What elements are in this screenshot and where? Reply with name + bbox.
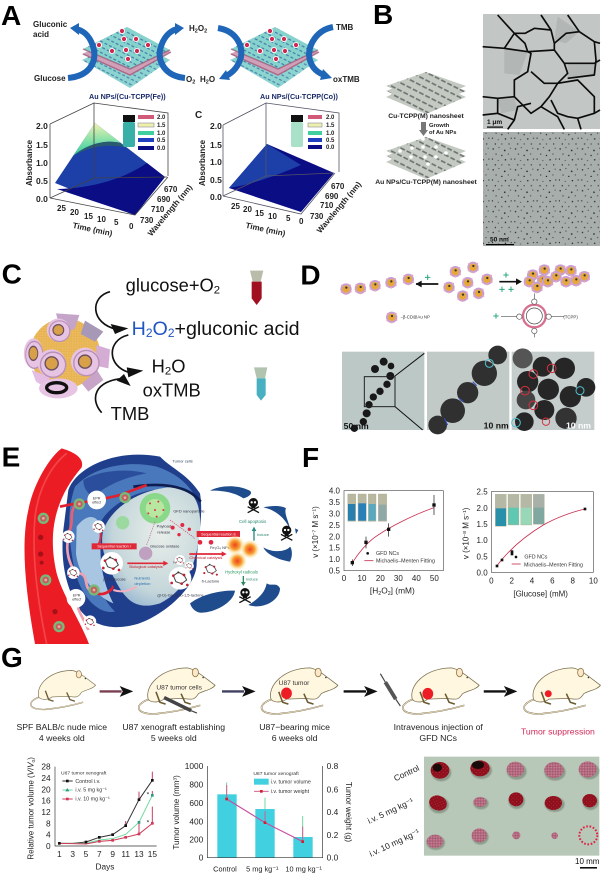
chart: H2O2 kinetics: 30 [394, 574, 403, 583]
row labels: treatment groups: i.v. 5 mg kg⁻¹ [366, 796, 415, 826]
row labels: treatment groups: i.v. 10 mg kg⁻¹ [368, 827, 421, 859]
blood vessel [25, 448, 89, 644]
TEM image: network close-up [512, 348, 595, 431]
stage captions: SPF BALB/c nude mice [16, 722, 107, 732]
legend: Fe plot vial and colour scale: 2.0 [157, 115, 166, 121]
3D plot: Au NPs/(Cu-TCPP(Co)): 15 [255, 209, 264, 218]
TEM image: chain close-up: 10 nm [484, 421, 509, 431]
chart: glucose kinetics: 8 [570, 577, 575, 586]
line chart: relative tumor volume: 11 [121, 849, 130, 859]
vessel branches and EPR effect [60, 485, 147, 630]
chart: glucose kinetics: 2.5 [477, 488, 488, 497]
bar chart: tumor volume and weight: 200 [189, 835, 204, 845]
photo: excised tumors [424, 757, 599, 856]
panel C: cascade reaction scheme [2, 258, 300, 424]
3D plot: Au NPs/(Cu-TCPP(Fe)): 2.0 [36, 121, 48, 131]
3D plot: Au NPs/(Cu-TCPP(Fe)): 730 [140, 216, 154, 225]
hydroxyl radicals: Hydroxyl radicals [225, 570, 258, 575]
label box: sequential reaction I: Sequential reaction I [97, 545, 131, 549]
labels in tumor cell: release [157, 529, 171, 534]
3D plot: Au NPs/(Cu-TCPP(Fe)): 690 [157, 195, 171, 204]
chart: glucose kinetics: 2.0 [477, 504, 488, 513]
chart: H2O2 kinetics: 20 [376, 574, 385, 583]
panel A: reaction schemes and 3D absorbance plots [1, 0, 363, 238]
bar chart: tumor volume and weight: Control [213, 865, 237, 874]
line chart: relative tumor volume: 24 [41, 773, 51, 783]
label box: sequential reaction II [197, 531, 240, 537]
3D plot: Au NPs/(Cu-TCPP(Fe)): 25 [57, 204, 66, 213]
reaction labels: O [198, 24, 204, 33]
3D plot: Au NPs/(Cu-TCPP(Co)): 0 [299, 217, 304, 226]
line chart: relative tumor volume: 3 [70, 849, 75, 859]
labels in tumor cell [103, 459, 230, 598]
bar chart: tumor volume and weight: 600 [189, 798, 204, 808]
chart: glucose kinetics: 2 [509, 577, 514, 586]
legend: Co plot vial and colour scale: 1.5 [326, 123, 335, 129]
legend: Co plot vial and colour scale: 2.0 [326, 115, 335, 121]
TEM image: network close-up: 10 nm [566, 421, 591, 431]
vessel branches and EPR effect: EPR [73, 594, 81, 598]
stage captions: Intravenous injection of [394, 722, 483, 732]
row labels: treatment groups [366, 763, 421, 859]
heading: C: C [2, 258, 22, 289]
chart: H2O2 kinetics: 2 [388, 591, 391, 597]
chart: glucose kinetics: −8 [462, 531, 468, 537]
line chart: relative tumor volume: 8 [46, 818, 51, 828]
chart: glucose kinetics: 0.0 [477, 568, 488, 577]
3D plot: Au NPs/(Cu-TCPP(Co)): 670 [331, 182, 345, 191]
chart: glucose kinetics [462, 488, 598, 598]
chart: H2O2 kinetics: 0 [342, 574, 347, 583]
mouse: U87 bearing [262, 668, 338, 714]
chart: glucose kinetics: Michaelis–Menten Fitting [524, 562, 583, 568]
mouse: U87 xenograft establishing [139, 668, 215, 714]
stage captions: U87−bearing mice [259, 722, 330, 732]
bar chart: tumor volume and weight: 800 [189, 780, 204, 790]
mouse: tumor suppression [524, 668, 600, 714]
reaction labels: 2 [195, 28, 198, 34]
chart: glucose kinetics: 6 [550, 577, 555, 586]
chart: glucose kinetics: M s [462, 516, 471, 531]
reaction labels: H [200, 75, 206, 84]
3D plot: Au NPs/(Cu-TCPP(Fe)): 20 [70, 208, 79, 217]
3D plot: Au NPs/(Cu-TCPP(Fe)): 710 [151, 205, 165, 214]
chart: H2O2 kinetics: 2.5 [329, 521, 341, 530]
chart: glucose kinetics: GFD NCs [524, 555, 548, 561]
labels in tumor cell: H₂O₂ [187, 566, 196, 571]
panel D: assembly scheme and TEM images [300, 259, 595, 434]
labels in tumor cell: (β-D)-Glucono-1,5-lactone [157, 593, 204, 598]
reaction labels: Gluconic [33, 20, 68, 29]
induce arrows and labels: Cell apoptosis [239, 519, 266, 524]
chart: H2O2 kinetics: 2 [378, 591, 381, 597]
chart: H2O2 kinetics: 10 [358, 574, 367, 583]
chart: H2O2 kinetics: −7 [311, 529, 317, 535]
legend: Fe plot vial and colour scale: 0.0 [157, 146, 166, 152]
text: H2O2 + gluconic acid: O [153, 318, 168, 340]
line chart: relative tumor volume: 16 [41, 796, 51, 806]
chart: H2O2 kinetics: GFD NCs [376, 551, 399, 557]
chart: glucose kinetics: 1.0 [477, 536, 488, 545]
tube: teal solution [254, 367, 267, 401]
arrow: hydrogen peroxide to water [218, 28, 241, 80]
bar chart: tumor volume and weight: 0 [199, 853, 204, 863]
3D plot: Au NPs/(Cu-TCPP(Co)): Time (min) [245, 221, 286, 238]
legend: Co plot vial and colour scale: 1.0 [326, 131, 335, 137]
line chart: relative tumor volume: 0 [46, 841, 51, 851]
vessel branches and EPR effect: EPR [93, 496, 101, 500]
labels in tumor cell: Tumor cells [172, 459, 193, 464]
TEM image: low magnification chain [342, 352, 424, 432]
line chart: relative tumor volume: 1 [57, 849, 62, 859]
TEM image: nanosheet network [483, 14, 600, 129]
3D plot: Au NPs/(Cu-TCPP(Co)): 10 [268, 212, 277, 221]
stage captions: 5 weeks old [151, 733, 197, 743]
bar chart: tumor volume and weight: 0.0 [327, 853, 339, 863]
labels in tumor cell: H₂O₂ [173, 559, 183, 564]
chart: glucose kinetics: −1 [462, 510, 468, 516]
induce arrows and labels: Induce [246, 577, 259, 582]
chart: H2O2 kinetics: v (×10 [311, 535, 320, 558]
stage captions: GFD NCs [419, 733, 458, 743]
GFD nanoparticle [116, 493, 170, 560]
stage captions: U87 xenograft establishing [122, 722, 225, 732]
text: H2O2 + gluconic acid: +gluconic acid [175, 318, 300, 340]
induce arrows and labels: Induce [257, 532, 270, 537]
chart: H2O2 kinetics: 1.0 [329, 555, 341, 564]
line chart: relative tumor volume [27, 757, 157, 872]
3D plot: Au NPs/(Cu-TCPP(Co)): 690 [325, 192, 339, 201]
charts group [27, 757, 339, 874]
labels in tumor cell: Glucose oxidase [150, 543, 180, 548]
line chart: relative tumor volume: 5 [84, 849, 89, 859]
text: glucose + O2: 2 [214, 285, 220, 297]
chart: glucose kinetics: 0.5 [477, 552, 488, 561]
3D plot: Au NPs/(Cu-TCPP(Co)) [198, 92, 363, 238]
3D plot: Au NPs/(Cu-TCPP(Fe)): 0 [129, 222, 134, 231]
arrow: TMB to oxTMB [309, 27, 333, 80]
heading: E: E [2, 442, 20, 473]
text: H2O2 + gluconic acid: H [132, 318, 146, 340]
bar chart: tumor volume and weight: Tumor volume (mm [172, 781, 181, 850]
label: growth of Au NPs: Growth [429, 123, 450, 129]
chart: H2O2 kinetics: 1.5 [329, 544, 341, 553]
stage captions: 6 weeks old [272, 733, 318, 743]
workflow: five mouse stages [16, 668, 600, 743]
3D plot: Au NPs/(Cu-TCPP(Co)): 1.0 [210, 157, 222, 167]
molecules [100, 552, 220, 590]
3D plot: Au NPs/(Cu-TCPP(Co)): 0.5 [210, 175, 222, 185]
dead cell fragments [190, 486, 298, 613]
bar chart: tumor volume and weight: ) [172, 775, 181, 778]
chart: H2O2 kinetics: ) [311, 506, 320, 509]
3D plot: Au NPs/(Cu-TCPP(Co)): Absorbance [198, 139, 207, 186]
stage captions: Tumor suppression [521, 726, 595, 736]
panel B: nanosheet growth and TEM images [373, 0, 600, 246]
line chart: relative tumor volume: 0 [31, 759, 37, 762]
chart: H2O2 kinetics: 3.0 [329, 509, 341, 518]
labels in tumor cell: Fe₃O₄ NPs [210, 545, 230, 550]
arrow: glucose to gluconic acid [68, 23, 94, 78]
line chart: relative tumor volume: Days [96, 862, 114, 872]
3D plot: Au NPs/(Cu-TCPP(Fe)): 15 [84, 212, 93, 221]
panel E: tumor mechanism illustration [2, 442, 298, 644]
3D plot: Au NPs/(Cu-TCPP(Co)): Wavelength (nm) [315, 180, 363, 235]
panel G: mouse workflow, charts and tumor photo [1, 642, 600, 874]
3D plot: Au NPs/(Cu-TCPP(Fe)) [25, 92, 194, 238]
3D plot: Au NPs/(Cu-TCPP(Fe)): Absorbance [25, 139, 34, 186]
3D plot: Au NPs/(Cu-TCPP(Co)): 730 [310, 212, 324, 221]
labels in tumor cell: Biological catalysis [129, 564, 163, 569]
3D plot: Au NPs/(Cu-TCPP(Fe)): 1.5 [36, 140, 48, 150]
line chart: relative tumor volume: 15 [148, 849, 157, 859]
bar chart: tumor volume and weight: 5 mg kg⁻¹ [246, 865, 279, 874]
chart: glucose kinetics: ) [462, 507, 471, 510]
3D plot: Au NPs/(Cu-TCPP(Co)): Au NPs/(Cu-TCPP(Co)) [260, 92, 338, 101]
label: growth of Au NPs: of Au NPs [429, 130, 456, 136]
axis label: tumor weight: Tumor weight (g) [344, 782, 353, 842]
legend: Fe plot vial and colour scale: 0.5 [157, 138, 166, 144]
chart: H2O2 kinetics: 3.5 [329, 498, 341, 507]
chart: H2O2 kinetics: Michaelis–Menten Fitting [376, 558, 435, 564]
heading: D: D [300, 259, 321, 290]
molecule: TCPP [493, 293, 578, 337]
reaction labels: Glucose [34, 74, 66, 83]
line chart: relative tumor volume: 20 [41, 784, 51, 794]
chart: H2O2 kinetics: O [381, 586, 388, 596]
hydroxyl radicals [225, 536, 259, 575]
reaction labels: 2 [192, 80, 195, 86]
line chart: relative tumor volume: * [147, 791, 150, 798]
line chart: relative tumor volume: 4 [46, 830, 51, 840]
line chart: relative tumor volume: 7 [97, 849, 102, 859]
TEM image: Au nanoparticles [483, 132, 600, 246]
3D plot: Au NPs/(Cu-TCPP(Co)): 1.5 [210, 140, 222, 150]
nanosheet: Cu-TCPP(M) [386, 72, 466, 114]
mouse: U87 bearing: U87 tumor [279, 680, 310, 687]
text: glucose + O2: glucose+O [126, 275, 214, 296]
TEM image: nanosheet network: 1 μm [487, 119, 502, 126]
3D plot: Au NPs/(Cu-TCPP(Fe)): 10 [97, 215, 106, 224]
bar chart: tumor volume and weight: 0.6 [327, 784, 339, 794]
chart: H2O2 kinetics [311, 487, 443, 597]
stage captions [16, 722, 595, 743]
label box: sequential reaction II: Sequential reaction II [201, 532, 236, 536]
labels in tumor cell: depletion [134, 581, 151, 586]
heading: G: G [1, 642, 23, 673]
chart: H2O2 kinetics: 40 [412, 574, 421, 583]
Fe3O4 particles [171, 523, 213, 545]
line chart: relative tumor volume: 12 [41, 807, 51, 817]
3D plot: Au NPs/(Cu-TCPP(Co)): 5 [286, 214, 291, 223]
line chart: relative tumor volume: * [147, 819, 150, 826]
line chart: relative tumor volume: ) [27, 757, 36, 760]
heading: F: F [302, 442, 319, 473]
bar chart: tumor volume and weight [172, 761, 339, 874]
text: H2O: 2 [165, 366, 171, 378]
reaction labels: oxTMB [333, 75, 360, 84]
labels in tumor cell: δ-Lactone [202, 579, 220, 584]
bar chart: tumor volume and weight: 0.2 [327, 830, 339, 840]
legend: beta-CD Au NP [386, 312, 430, 323]
line chart: relative tumor volume: Relative tumor volume (V/V [27, 762, 36, 860]
bar chart: tumor volume and weight: 10 mg kg⁻¹ [285, 865, 322, 874]
stage captions: 4 weeks old [39, 733, 85, 743]
legend: Fe plot vial and colour scale: 1.5 [157, 123, 166, 129]
3D plot: Au NPs/(Cu-TCPP(Fe)): 0.5 [36, 176, 48, 186]
3D plot: Au NPs/(Cu-TCPP(Co)): 20 [243, 205, 252, 214]
caption: Cu-TCPP(M) nanosheet: Cu-TCPP(M) nanosheet [388, 113, 464, 120]
3D plot: Au NPs/(Cu-TCPP(Fe)): 5 [114, 218, 119, 227]
line chart: relative tumor volume: 9 [110, 849, 115, 859]
labels in tumor cell: Chemical catalysis [189, 555, 222, 560]
legend: Co plot vial and colour scale: 0.0 [326, 145, 335, 151]
mouse: U87 xenograft establishing: U87 tumor cells [156, 684, 203, 691]
caption: Au NPs/Cu-TCPP(M) nanosheet: Au NPs/Cu-TCPP(M) nanosheet [375, 179, 478, 186]
arrows between stages [100, 686, 517, 697]
labels in tumor cell: Payload [157, 524, 171, 529]
labels in tumor cell: Nutrients [134, 575, 150, 580]
TEM image: Au nanoparticles: 50 nm [490, 236, 509, 244]
reaction labels: 2 [204, 28, 207, 34]
labels in tumor cell: β-D-Glucose [103, 577, 127, 582]
bar chart: tumor volume and weight: 0.4 [327, 807, 339, 817]
nanosheet: glucose oxidase mimic [82, 27, 171, 88]
bar chart: tumor volume and weight: i.v. tumor volume [271, 780, 311, 786]
line chart: relative tumor volume: 13 [134, 849, 144, 859]
line chart: relative tumor volume: 28 [41, 762, 51, 772]
mouse: intravenous injection with syringe [380, 668, 479, 714]
TEM image: chain close-up [427, 346, 509, 434]
chart: H2O2 kinetics: 4.0 [329, 487, 341, 496]
3D plot: Au NPs/(Cu-TCPP(Fe)): Wavelength (nm) [146, 183, 194, 238]
label box: sequential reaction I [92, 543, 137, 549]
chart: glucose kinetics: 1.5 [477, 520, 488, 529]
line chart: relative tumor volume: Control i.v. [75, 779, 100, 785]
3D plot: Au NPs/(Cu-TCPP(Fe)): Au NPs/(Cu-TCPP(Fe)) [89, 92, 166, 101]
arrows: catalysis [127, 520, 227, 566]
scheme: network aggregate assembly [499, 264, 590, 293]
bar chart: tumor volume and weight: 400 [189, 816, 204, 826]
nanosheet: Au NPs/Cu-TCPP(M) [386, 137, 466, 179]
text: H2O2 + gluconic acid: 2 [168, 326, 175, 340]
vessel branches and EPR effect: effect [72, 598, 81, 602]
3D plot: Au NPs/(Cu-TCPP(Co)): 710 [320, 201, 334, 210]
text: H2O2 + gluconic acid: 2 [146, 326, 153, 340]
chart: H2O2 kinetics: ] (mM) [391, 586, 415, 596]
arrow: TMB to oxTMB [95, 374, 131, 413]
nanosheet: peroxidase mimic [230, 27, 319, 88]
reaction labels: 2 [206, 80, 209, 86]
TEM image: low magnification chain: 50 nm [344, 421, 369, 431]
3D plot: Au NPs/(Cu-TCPP(Co)): 0.0 [210, 192, 222, 202]
chart: H2O2 kinetics: 0.5 [329, 567, 341, 576]
reaction labels [33, 20, 360, 86]
skulls [239, 498, 292, 603]
chart: glucose kinetics: 0 [489, 577, 494, 586]
heading: A: A [1, 0, 21, 31]
vessel branches and EPR effect: effect [92, 500, 101, 504]
bar chart: tumor volume and weight: U87 tumor xenograft [253, 771, 299, 777]
chart: H2O2 kinetics: [H [370, 586, 378, 596]
chart: glucose kinetics: 10 [589, 577, 598, 586]
3D plot: Au NPs/(Cu-TCPP(Fe)): 670 [164, 185, 178, 194]
bar chart: tumor volume and weight: 0.8 [327, 761, 339, 771]
label: c: C [195, 110, 202, 121]
chart: H2O2 kinetics: 2.0 [329, 532, 341, 541]
legend: beta-CD Au NP: −β-CD@Au NP [400, 315, 430, 320]
row labels: treatment groups: Control [392, 763, 421, 783]
text: oxTMB: oxTMB [143, 380, 201, 401]
chart: H2O2 kinetics: 50 [430, 574, 439, 583]
chart: glucose kinetics: [Glucose] (mM) [513, 589, 568, 598]
3D plot: Au NPs/(Cu-TCPP(Co)): 2.0 [210, 121, 222, 131]
molecule: TCPP: (TCPP) [563, 314, 578, 319]
chart: glucose kinetics: v (×10 [462, 537, 471, 559]
chart: H2O2 kinetics: −1 [311, 509, 317, 515]
chart: H2O2 kinetics: M s [311, 515, 320, 530]
line chart: relative tumor volume: i.v. 5 mg kg⁻¹ [75, 788, 107, 794]
reaction labels: O [186, 75, 192, 84]
3D plot: Au NPs/(Cu-TCPP(Fe)): 1.0 [36, 158, 48, 168]
bar chart: tumor volume and weight: 1000 [185, 761, 204, 771]
arrow: glucose to H2O2 [96, 292, 128, 334]
nanoparticle with cyclodextrin rings [24, 313, 110, 398]
line chart: relative tumor volume: U87 tumor xenograft [61, 770, 107, 776]
text: H2O: H [152, 356, 165, 377]
reaction labels: H [189, 24, 195, 33]
text: H2O: O [171, 356, 185, 377]
scheme: linear chain assembly [340, 274, 438, 295]
legend: Fe plot vial and colour scale: 1.0 [157, 131, 166, 137]
arrow: growth of Au NPs [419, 122, 428, 136]
bar chart: tumor volume and weight: i.v. tumor weight [271, 789, 310, 795]
reaction labels: O [209, 75, 215, 84]
induce arrows and labels [239, 519, 270, 586]
tube: red solution [250, 271, 263, 305]
mouse: SPF BALB/c nude [31, 670, 96, 710]
text: TMB: TMB [111, 403, 149, 424]
chart: glucose kinetics: 4 [530, 577, 535, 586]
legend: Co plot vial and colour scale: 0.5 [326, 138, 335, 144]
3D plot: Au NPs/(Cu-TCPP(Fe)): 0.0 [36, 194, 48, 204]
legend: Co plot vial and colour scale [291, 115, 335, 151]
bar chart: tumor volume and weight: 3 [172, 778, 178, 781]
arrow: H2O2 to H2O [112, 335, 143, 377]
labels in tumor cell: GFD nanoparticle [173, 508, 205, 513]
reaction labels: TMB [336, 23, 354, 32]
tumor cell body [62, 455, 201, 627]
3D plot: Au NPs/(Cu-TCPP(Co)): 25 [231, 202, 240, 211]
line chart: relative tumor volume: i.v. 10 mg kg⁻¹ [75, 796, 110, 802]
legend: Fe plot vial and colour scale [123, 115, 166, 152]
3D plot: Au NPs/(Cu-TCPP(Fe)): Time (min) [72, 221, 113, 238]
reaction labels: acid [33, 30, 49, 39]
arrow: oxygen to hydrogen peroxide [160, 23, 185, 78]
panel F: enzyme kinetics charts [302, 442, 598, 598]
scheme: dispersed nanoparticles [443, 262, 493, 302]
scale bar: 10 mm: 10 mm [575, 857, 600, 866]
